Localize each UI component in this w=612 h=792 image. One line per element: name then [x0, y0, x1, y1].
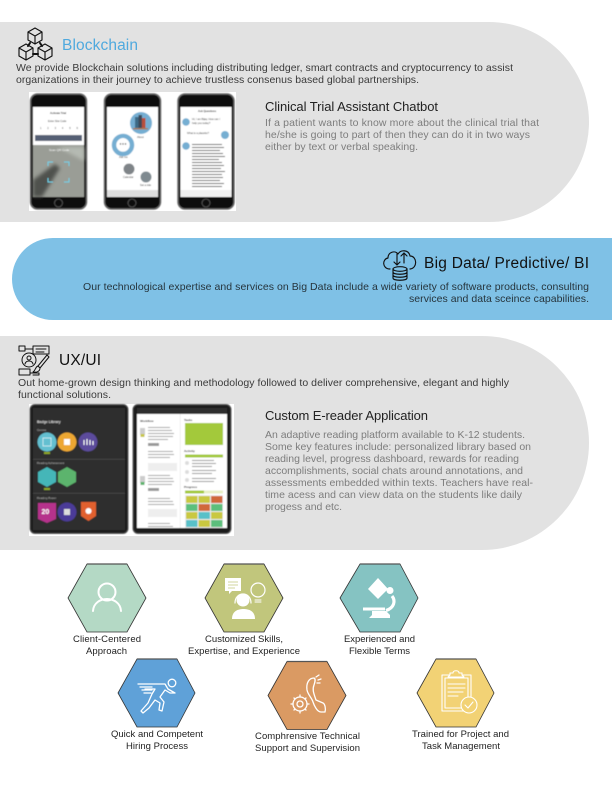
label: experienced: [344, 634, 415, 657]
tablet: dashboard: Workflow: [140, 419, 154, 423]
tablet: badge library: Reading Achievement: [37, 461, 64, 465]
tablet: badge library: [30, 404, 128, 534]
text: e-reader description: An adaptive reading platform available to K-12 students.: [265, 429, 525, 441]
icon: design tools: [19, 346, 49, 375]
tablet: badge library: 20: [42, 509, 49, 516]
text: blockchain intro: We provide Blockchain solutions including distributing ledger, smart contracts and cryptocurrency to assist: [16, 62, 513, 74]
feature: quick hiring process: [111, 659, 203, 752]
tablet: badge library: Genres: [37, 428, 47, 432]
tablet: badge library: Reading Power: [37, 496, 56, 500]
tablet: dashboard: Tasks: [184, 418, 193, 422]
tablet: dashboard: Activity: [184, 449, 195, 453]
text: e-reader description: reading level, progress dashboard, rewards for reading: [265, 453, 519, 465]
label: project management: Task Management: [422, 741, 500, 752]
label: quick hiring: Hiring Process: [126, 741, 188, 752]
feature: technical support: [255, 662, 360, 754]
panel: ux/ui: [0, 336, 589, 550]
phone: chat screen: Hi, I am Bijay. How can I: [192, 117, 220, 121]
text: e-reader description: accomplishments, social chats around annotations, and: [265, 465, 523, 477]
phone: scan screen: Scan QR Code: [49, 148, 70, 152]
label: experienced: Flexible Terms: [349, 646, 410, 657]
icon: blockchain cubes: [19, 28, 52, 60]
label: client-centered: Client-Centered: [73, 634, 141, 645]
feature: project management: [412, 659, 509, 752]
feature: customized skills: [188, 564, 300, 657]
feature: experienced and flexible terms: [340, 564, 418, 657]
text: chatbot description: either by text or verbal speaking.: [265, 141, 418, 153]
text: big data description: services and data sceince capabilities.: [409, 293, 589, 305]
phone: scan screen: Enter Site Code: [48, 119, 67, 123]
text: ux/ui intro: Out home-grown design thinking and methodology followed to deliver comprehensive, elegant and highly: [18, 377, 510, 389]
phone: menu screen: [104, 94, 160, 209]
text: blockchain intro: organizations in their journey to achieve trustless consenus based global partnerships.: [16, 74, 419, 86]
text: chatbot description: he/she is going to part of then they can do it in two ways: [265, 129, 530, 141]
icon: clipboard with check: [442, 671, 477, 713]
heading: blockchain: Blockchain: [62, 37, 138, 54]
tablet: dashboard: [133, 404, 231, 534]
phone: chat screen: help you today?: [192, 121, 211, 125]
phone: chat screen: Ask Questions: [198, 109, 217, 113]
label: technical support: Comphrensive Technical: [255, 731, 360, 742]
phone: chat screen: [178, 94, 234, 209]
label: client-centered: Approach: [86, 646, 127, 657]
text: e-reader description: time acess and can view data on the students like daily: [265, 489, 523, 501]
panel: blockchain: [0, 22, 589, 222]
label: experienced: Experienced and: [344, 634, 415, 645]
text: e-reader description: [265, 429, 534, 513]
text: blockchain intro: [16, 62, 513, 86]
label: customized skills: Expertise, and Experience: [188, 646, 300, 657]
phone: scan screen: [30, 94, 86, 209]
tablet: badge library: Badge Library: [37, 420, 61, 424]
label: quick hiring: [111, 729, 203, 752]
phone: menu screen: Calendar: [123, 175, 134, 179]
text: chatbot description: If a patient wants to know more about the clinical trial that: [265, 117, 539, 129]
text: e-reader description: assessments embedded within texts. Teachers have real-: [265, 477, 534, 489]
label: technical support: Support and Supervision: [255, 743, 360, 754]
label: project management: [412, 729, 509, 752]
phone: scan screen: Activate Trial: [50, 111, 66, 115]
text: chatbot description: [265, 117, 539, 153]
image: e-reader tablet screens: [29, 404, 234, 536]
heading: ux/ui: UX/UI: [59, 352, 101, 369]
icon: cloud database: [384, 251, 416, 280]
image: chatbot phone screens: [29, 92, 236, 211]
icon: headset and lightbulb: [225, 578, 265, 619]
text: ux/ui intro: functional solutions.: [18, 389, 111, 401]
text: e-reader description: progess and etc.: [265, 501, 342, 513]
text: e-reader description: Some key features include: personalized library based on: [265, 441, 531, 453]
text: ux/ui intro: [18, 377, 510, 401]
phone: chat screen: What is a placebo?: [187, 131, 210, 135]
feature: client-centered approach: [68, 564, 146, 657]
label: quick hiring: Quick and Competent: [111, 729, 203, 740]
icon: gear and phone hand: [291, 675, 325, 713]
text: big data description: Our technological expertise and services on Big Data include a wide variety of software products, consulting: [83, 281, 589, 293]
label: client-centered: [73, 634, 141, 657]
label: customized skills: Customized Skills,: [205, 634, 283, 645]
label: customized skills: [188, 634, 300, 657]
label: technical support: [255, 731, 360, 754]
heading: clinical trial chatbot: Clinical Trial Assistant Chatbot: [265, 99, 438, 114]
tablet: dashboard: Progress: [184, 485, 197, 489]
panel: big data: [12, 238, 612, 320]
phone: menu screen: Ask me: [119, 155, 128, 159]
heading: big data: Big Data/ Predictive/ BI: [424, 255, 589, 272]
icon: person: [93, 584, 121, 611]
icon: microscope: [363, 578, 394, 618]
phone: menu screen: Set a ride: [140, 183, 152, 187]
heading: custom e-reader: Custom E-reader Application: [265, 408, 428, 423]
phone: scan screen: 1 2 3 4 5 6: [40, 126, 79, 130]
icon: running person: [138, 679, 176, 713]
text: big data description: [83, 281, 589, 305]
label: project management: Trained for Project and: [412, 729, 509, 740]
phone: menu screen: About: [137, 135, 144, 139]
